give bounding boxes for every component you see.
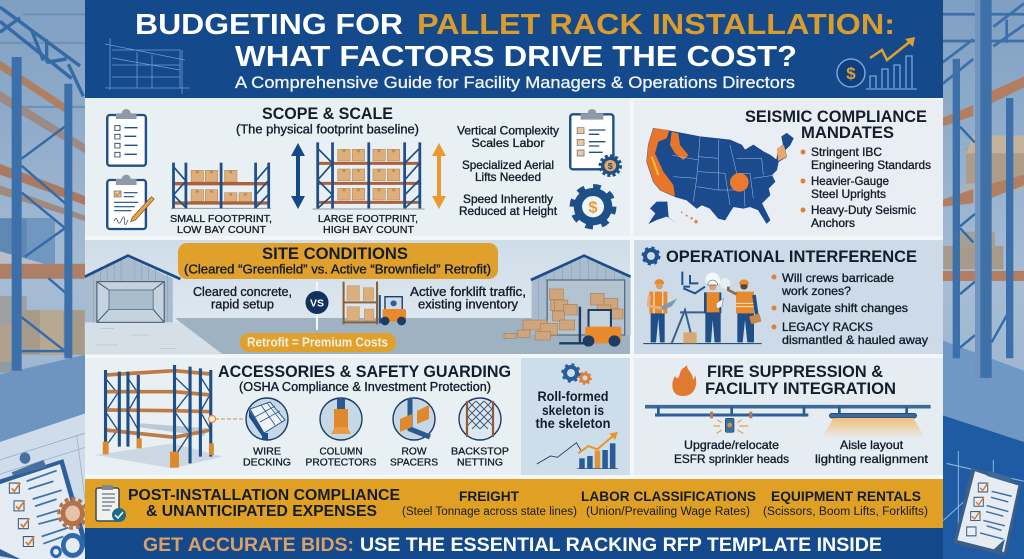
footer banner — [85, 528, 943, 559]
label: large footprint — [318, 213, 418, 236]
vs badge — [306, 282, 328, 330]
text: vertical complexity list: Scales Labor — [472, 136, 544, 150]
icon: checklist with dollar gear: $ — [608, 161, 613, 171]
panel: post-installation expenses bar — [85, 479, 943, 528]
bullet list: Stringent IBC — [811, 145, 882, 159]
label: wire decking: DECKING — [243, 456, 291, 468]
label: large footprint: HIGH BAY COUNT — [323, 224, 415, 236]
label: wire decking — [243, 446, 291, 468]
icon: dollar coin with rising chart: $ — [846, 64, 856, 83]
chart: small rack — [171, 163, 271, 208]
heading: OPERATIONAL INTERFERENCE — [666, 248, 917, 266]
title: BUDGETING FOR — [135, 9, 403, 41]
panel: scope and scale — [85, 98, 630, 236]
text: skeleton note — [536, 389, 610, 431]
icon: column protector — [320, 398, 362, 440]
title — [135, 9, 895, 73]
icon: forklift at rack — [344, 282, 406, 325]
heading: FIRE SUPPRESSION & — [707, 363, 883, 381]
item: freight: FREIGHT — [459, 489, 520, 504]
heading: (OSHA Compliance & Investment Protection) — [239, 380, 491, 394]
heading: ACCESSORIES & SAFETY GUARDING — [218, 363, 511, 381]
label: column protectors: PROTECTORS — [306, 456, 376, 468]
text: vertical complexity list: Vertical Complexity — [457, 124, 559, 138]
label: row spacers: SPACERS — [390, 456, 438, 468]
bullet list: Will crews barricade — [782, 271, 894, 285]
heading: (The physical footprint baseline) — [236, 122, 419, 136]
bullet list: Heavy-Duty Seismic — [811, 203, 916, 217]
item: freight — [402, 489, 577, 518]
label: backstop netting: NETTING — [457, 456, 503, 468]
heading: MANDATES — [801, 124, 894, 142]
item: equipment rentals — [763, 489, 928, 518]
text: vertical complexity list: Speed Inherently — [463, 192, 553, 206]
heading: & UNANTICIPATED EXPENSES — [146, 503, 377, 520]
panel: operational interference — [634, 240, 943, 354]
heading — [745, 108, 927, 142]
background: left warehouse scene — [0, 0, 86, 559]
bullet list — [800, 145, 931, 230]
panel: roll-formed skeleton — [521, 358, 630, 475]
worker two — [704, 280, 723, 342]
text: greenfield: rapid setup — [211, 298, 274, 312]
text: skeleton note: the skeleton — [536, 416, 610, 431]
label: wire decking: WIRE — [253, 446, 281, 458]
chart: large rack — [313, 142, 425, 209]
background: right warehouse scene — [943, 0, 1024, 559]
label: small footprint: SMALL FOOTPRINT, — [170, 213, 272, 225]
item: labor classifications: (Union/Prevailing Wage Rates) — [586, 506, 750, 518]
vs badge: VS — [310, 298, 324, 310]
connector line — [208, 416, 245, 422]
illustration: three crew members — [643, 272, 762, 344]
item: labor classifications: LABOR CLASSIFICATIONS — [581, 489, 756, 504]
heading: SCOPE & SCALE — [262, 105, 393, 123]
text: vertical complexity list: Reduced at Height — [459, 204, 558, 218]
icon: wire decking — [246, 398, 288, 440]
map: seismic zones of the United States — [647, 128, 793, 224]
text: skeleton note: skeleton is — [542, 403, 604, 418]
arrow: orange vertical — [432, 143, 446, 209]
text: skeleton note: Roll-formed — [538, 389, 608, 404]
panel: fire suppression and integration — [634, 358, 943, 475]
icon: row spacers — [393, 398, 435, 440]
arrow: blue vertical — [291, 143, 305, 209]
heading — [236, 105, 419, 136]
icon: clipboard with pen — [107, 175, 154, 229]
header banner — [85, 0, 943, 98]
subtitle: A Comprehensive Guide for Facility Managers & Operations Directors — [235, 73, 795, 92]
label: row spacers: ROW — [402, 446, 427, 458]
label: row spacers — [390, 446, 438, 468]
bullet list: Steel Uprights — [811, 187, 886, 201]
heading — [705, 363, 896, 398]
heading — [128, 487, 400, 520]
text: greenfield: Cleared concrete, — [193, 285, 292, 299]
label: column protectors: COLUMN — [320, 446, 362, 458]
label: large footprint: LARGE FOOTPRINT, — [318, 213, 418, 225]
icon: active warehouse with forklift — [504, 256, 631, 347]
title: PALLET RACK INSTALLATION: — [417, 9, 895, 41]
icon: gear — [643, 248, 659, 264]
bullet list — [772, 271, 928, 347]
icon: dollar gear: $ — [588, 199, 598, 216]
label: small footprint: LOW BAY COUNT — [177, 224, 267, 236]
icon: backstop netting — [459, 398, 501, 440]
text: brownfield — [410, 285, 526, 312]
text: lighting — [815, 438, 929, 466]
text: brownfield: Active forklift traffic, — [410, 285, 526, 299]
heading: SEISMIC COMPLIANCE — [745, 108, 927, 126]
item: equipment rentals: (Scissors, Boom Lifts, Forklifts) — [763, 506, 928, 518]
illustration: 3D rack — [95, 365, 223, 468]
bullet list: Engineering Standards — [811, 158, 931, 172]
text: lighting: lighting realignment — [815, 452, 929, 466]
heading — [218, 363, 511, 394]
icon: gears — [562, 364, 591, 384]
bullet list: Anchors — [811, 216, 855, 230]
heading pill: (Cleared “Greenfield” vs. Active “Brownfield” Retrofit) — [184, 262, 491, 276]
icon: checklist with dollar gear — [570, 109, 621, 176]
text: sprinkler — [674, 438, 789, 466]
callout: retrofit premium: Retrofit = Premium Costs — [247, 334, 388, 350]
worker three — [728, 279, 762, 342]
heading pill — [178, 243, 498, 279]
text: brownfield: existing inventory — [418, 298, 519, 312]
icon: empty warehouse — [85, 256, 223, 354]
call to action: USE THE ESSENTIAL RACKING RFP TEMPLATE INSIDE — [360, 534, 882, 556]
item: labor classifications — [581, 489, 756, 518]
label: backstop netting: BACKSTOP — [451, 446, 509, 458]
panel: seismic compliance — [634, 100, 943, 236]
item: equipment rentals: EQUIPMENT RENTALS — [771, 489, 921, 504]
label: backstop netting — [451, 446, 509, 468]
heading: POST-INSTALLATION COMPLIANCE — [128, 487, 400, 504]
chart: rising cost — [537, 432, 618, 469]
text: greenfield — [193, 285, 292, 312]
bullet list: dismantled & hauled away — [782, 333, 928, 347]
text: sprinkler: Upgrade/relocate — [684, 438, 779, 452]
bullet list: Heavier-Gauge — [811, 174, 889, 188]
text: vertical complexity list: Lifts Needed — [475, 170, 541, 184]
illustration: sprinkler pipe and light — [645, 407, 931, 438]
icon: dollar coin with rising chart — [837, 37, 917, 89]
call to action: GET ACCURATE BIDS: — [143, 534, 354, 556]
title: WHAT FACTORS DRIVE THE COST? — [235, 41, 797, 73]
bullet list: LEGACY RACKS — [782, 320, 873, 334]
center column base — [85, 94, 943, 480]
item: freight: (Steel Tonnage across state lines) — [402, 506, 577, 518]
floor — [175, 318, 630, 354]
icon: blueprint sketch — [105, 38, 190, 94]
worker one — [648, 279, 677, 342]
panel: accessories and safety guarding — [85, 358, 521, 475]
label: small footprint — [170, 213, 272, 236]
text: lighting: Aisle layout — [840, 438, 904, 452]
label: column protectors — [306, 446, 376, 468]
icon: dollar gear — [572, 187, 614, 227]
icon: clipboard with check badge — [96, 485, 126, 522]
icon: flame — [672, 365, 696, 396]
text: vertical complexity list: Specialized Aerial — [462, 158, 554, 172]
icon: clipboard checklist — [107, 109, 146, 166]
bullet list: work zones? — [781, 284, 851, 298]
bullet list: Navigate shift changes — [782, 301, 908, 315]
text: sprinkler: ESFR sprinkler heads — [674, 452, 789, 466]
heading: FACILITY INTEGRATION — [705, 380, 896, 398]
panel: site conditions — [85, 240, 631, 354]
text: vertical complexity list — [457, 124, 559, 218]
heading pill: SITE CONDITIONS — [262, 245, 408, 263]
